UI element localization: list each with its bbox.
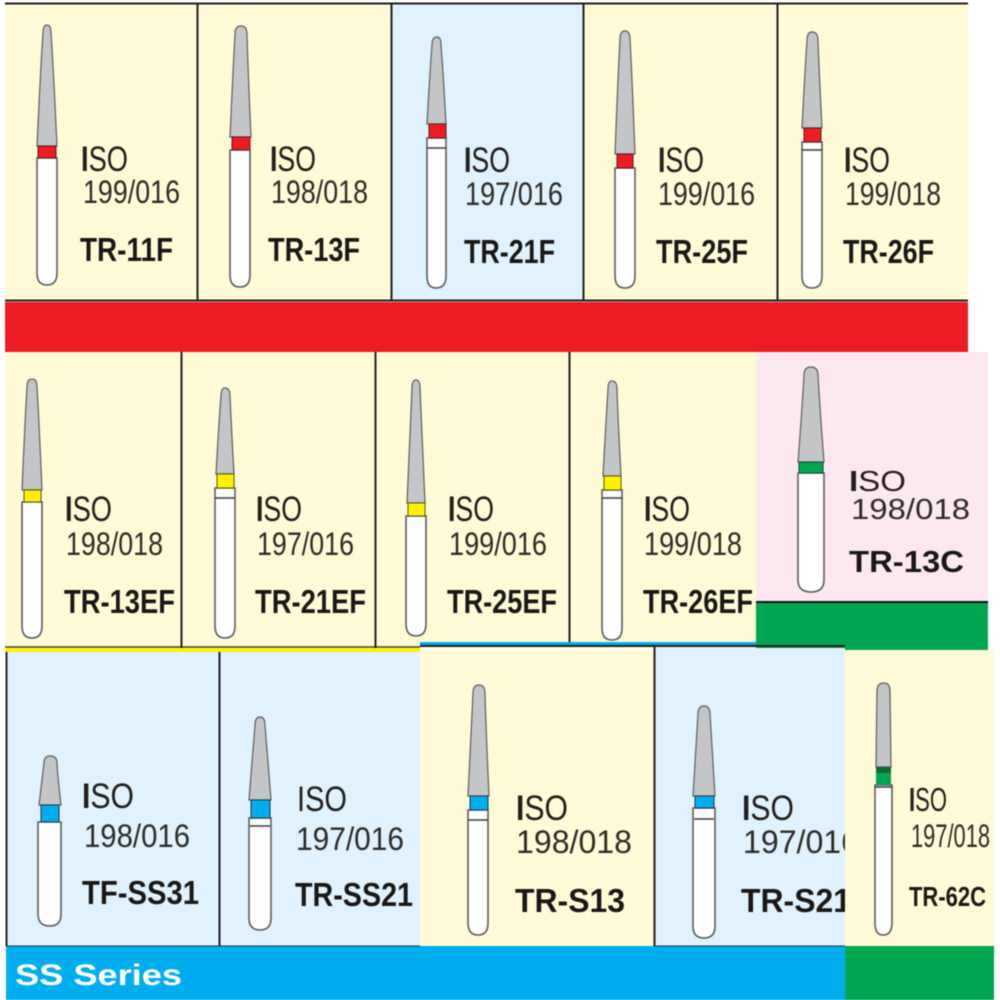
panel: row 3 blue SS pair <box>6 652 420 946</box>
icon: bur TR-21F <box>427 37 446 288</box>
label: TR-25EF: ISO <box>448 490 494 529</box>
label: TR-25F <box>656 141 755 270</box>
label: TR-26F: ISO <box>844 141 890 180</box>
panel: TR-21EF <box>215 388 366 638</box>
icon: bur TR-25F <box>615 31 635 288</box>
label: TR-13C: ISO <box>849 466 906 498</box>
icon: bur TF-SS31 <box>38 756 61 926</box>
icon: bur TR-S21 <box>693 706 715 938</box>
panel: TR-SS21 <box>249 717 413 930</box>
red series bar <box>5 302 968 352</box>
label: TR-21EF: TR-21EF <box>255 583 366 620</box>
label: TR-26EF <box>643 490 753 620</box>
panel: row 2 extra fine series <box>5 352 756 652</box>
panel: TR-26EF <box>602 381 753 640</box>
label: TR-25F: 199/016 <box>658 176 755 212</box>
label: TR-21F <box>464 141 563 270</box>
label: TF-SS31: TF-SS31 <box>82 874 199 911</box>
label: TR-S21: 197/016 <box>743 824 859 860</box>
label: TF-SS31 <box>82 777 199 911</box>
label: TR-11F <box>80 140 180 268</box>
label: TR-26F <box>843 141 941 270</box>
label: TR-26EF: TR-26EF <box>643 583 753 620</box>
label: TR-13F <box>268 140 368 268</box>
panel: TR-25EF <box>406 380 557 636</box>
label: TR-S21: ISO <box>742 789 794 828</box>
label: TR-SS21: ISO <box>297 780 347 819</box>
icon: bur TR-SS21 <box>249 717 271 930</box>
label: TF-SS31: 198/016 <box>84 818 190 854</box>
panel: TR-13EF <box>22 379 175 638</box>
blue series bar with heading <box>6 946 845 1000</box>
label: TR-11F: 199/016 <box>83 174 180 210</box>
label: TR-21EF: 197/016 <box>257 526 354 562</box>
panel: TR-26F <box>802 32 941 288</box>
label: TR-21EF <box>255 490 366 620</box>
icon: bur TR-26EF <box>602 381 622 640</box>
label: TR-S13: 198/018 <box>516 824 632 860</box>
label: TR-S21: TR-S21 <box>741 882 851 919</box>
label: TR-11F: TR-11F <box>80 231 173 268</box>
label: TR-11F: ISO <box>81 140 128 179</box>
panel: TR-S21 <box>420 646 859 946</box>
label: TR-13EF <box>64 490 175 620</box>
label: TR-25EF: TR-25EF <box>447 583 557 620</box>
label: TR-25EF <box>447 490 557 620</box>
label: TR-S21 <box>741 789 859 919</box>
label: TR-13F: 198/018 <box>271 174 368 210</box>
panel: TR-13F <box>230 26 368 287</box>
label: TR-13C: 198/018 <box>851 494 970 526</box>
label: TR-21F: TR-21F <box>464 233 555 270</box>
label: TR-SS21: TR-SS21 <box>295 876 413 913</box>
icon: bur TR-26F <box>802 32 822 288</box>
green series bar: TR-62C <box>845 946 994 1000</box>
label: TR-62C <box>909 781 990 912</box>
panel: TR-11F <box>37 25 180 285</box>
label: TR-21F: ISO <box>464 141 510 180</box>
panel: TR-13C <box>756 352 988 602</box>
label: TR-13C <box>849 466 970 579</box>
icon: bur TR-25EF <box>406 380 426 636</box>
label: TR-26F: 199/018 <box>845 176 941 212</box>
label: TR-21EF: ISO <box>256 490 302 529</box>
label: TR-SS21 <box>295 780 413 913</box>
label: TR-26F: TR-26F <box>843 233 934 270</box>
label: TR-S13: ISO <box>516 789 568 828</box>
icon: bur TR-11F <box>37 25 57 285</box>
label: TR-13C: TR-13C <box>849 544 964 579</box>
label: TR-SS21: 197/016 <box>296 821 404 857</box>
icon: bur TR-S13 <box>468 685 489 935</box>
label: TR-S13 <box>515 789 632 919</box>
label: TR-26EF: 199/018 <box>644 526 742 562</box>
label: TR-25F: ISO <box>658 141 704 180</box>
green series bar: coarse <box>756 602 988 650</box>
heading: SS Series: SS Series <box>15 959 182 992</box>
icon: bur TR-62C <box>875 683 892 935</box>
label: TR-26EF: ISO <box>644 490 690 529</box>
label: TR-13EF: 198/018 <box>66 526 163 562</box>
label: TR-13F: TR-13F <box>268 231 360 268</box>
panel: TR-25F <box>615 31 755 288</box>
panel: TR-62C <box>845 650 994 946</box>
label: TR-S13: TR-S13 <box>515 882 625 919</box>
label: TR-13EF: ISO <box>65 490 112 529</box>
icon: bur TR-13EF <box>22 379 42 638</box>
panel: TF-SS31 <box>38 756 199 926</box>
panel: row 1 fine series <box>5 4 968 301</box>
label: TR-25F: TR-25F <box>656 233 748 270</box>
panel: TR-S13 <box>420 650 654 946</box>
label: TR-62C: ISO <box>909 781 947 818</box>
label: TR-13F: ISO <box>270 140 316 179</box>
icon: bur TR-13C <box>798 367 824 592</box>
label: TR-13EF: TR-13EF <box>64 583 175 620</box>
label: TR-25EF: 199/016 <box>449 526 547 562</box>
icon: bur TR-21EF <box>215 388 235 638</box>
label: TF-SS31: ISO <box>82 777 134 816</box>
panel: TR-21F <box>427 37 563 288</box>
label: TR-21F: 197/016 <box>465 176 563 212</box>
icon: bur TR-13F <box>230 26 251 287</box>
